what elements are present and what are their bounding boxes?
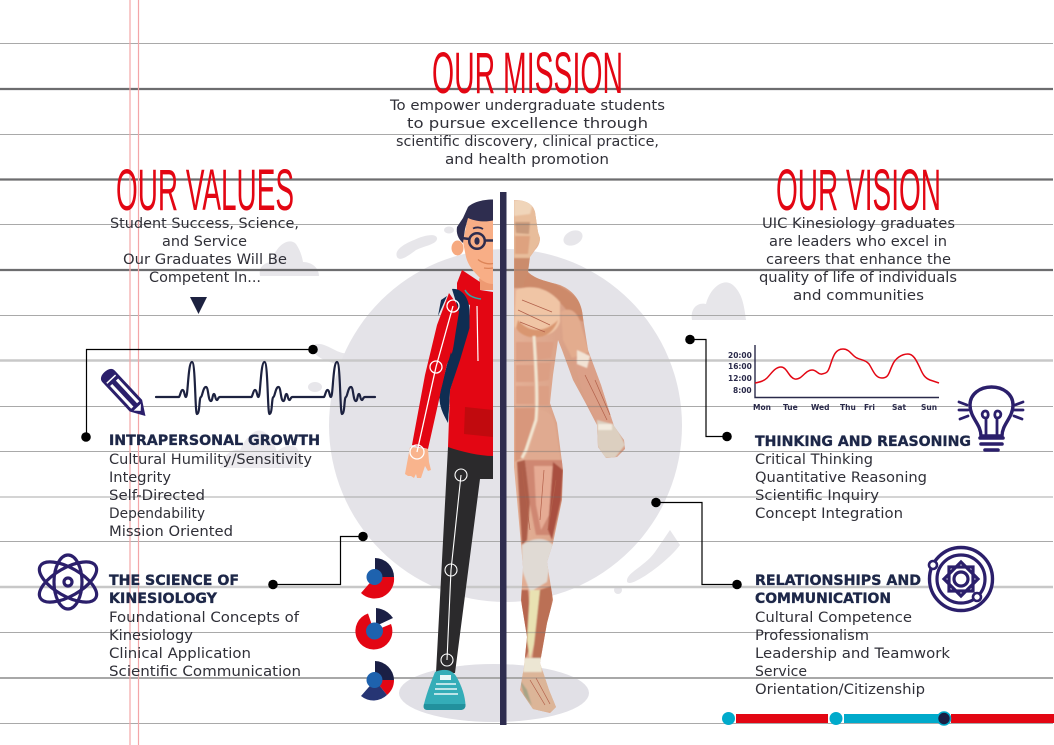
chart: weekly line chart: [728, 345, 939, 412]
text block: relationships and communication: [755, 573, 951, 698]
icon: pencil: [98, 366, 152, 422]
text block: intrapersonal growth: Cultural Humility/Sensitivity: [109, 452, 312, 468]
text block: relationships and communication: COMMUNICATION: [755, 591, 891, 607]
collar trim: [465, 290, 481, 299]
neck and face: [463, 216, 493, 290]
text block: intrapersonal growth: INTRAPERSONAL GROWTH: [109, 433, 320, 449]
text block: the science of kinesiology: Scientific Communication: [109, 664, 301, 680]
smile: [478, 260, 493, 268]
timeline node three: [938, 712, 950, 725]
text block: vision statement: [759, 216, 957, 304]
neck shadow: [479, 278, 493, 290]
text block: vision statement: are leaders who excel in: [769, 234, 947, 250]
text block: mission statement: and health promotion: [445, 152, 609, 168]
progress timeline: [722, 712, 1054, 725]
backpack lower lobe: [438, 296, 462, 423]
y axis labels: 8:00: [733, 386, 752, 395]
leg joint markers: [441, 469, 467, 666]
timeline node two: [830, 712, 842, 725]
connector: intrapersonal growth: [81, 345, 318, 442]
chart: donut one: [361, 558, 394, 599]
text block: values statement: [110, 216, 299, 286]
text block: relationships and communication: Orientation/Citizenship: [755, 682, 925, 698]
text block: the science of kinesiology: THE SCIENCE OF: [109, 573, 239, 589]
hoodie body: [448, 270, 493, 456]
text block: intrapersonal growth: Integrity: [109, 470, 171, 486]
eyebrow: [473, 227, 483, 229]
connector: relationships and communication: [651, 498, 742, 589]
arm joint markers: [410, 300, 459, 459]
text block: thinking and reasoning: Critical Thinking: [755, 452, 873, 468]
x axis labels: [753, 403, 937, 412]
connector: thinking and reasoning: [685, 335, 732, 441]
red data line: [755, 349, 939, 383]
text block: mission statement: scientific discovery, clinical practice,: [396, 134, 659, 150]
figure: anatomical muscle half: [514, 200, 625, 713]
hand: [405, 447, 431, 478]
y axis labels: [728, 351, 752, 395]
text block: values statement: Student Success, Science,: [110, 216, 299, 232]
hair: [457, 200, 493, 243]
background grey blobs: [220, 226, 746, 594]
glasses: [462, 233, 493, 249]
notebook margin lines: [130, 0, 138, 745]
backpack strap: [440, 289, 470, 422]
text block: vision statement: and communities: [793, 288, 924, 304]
shoe sole and laces: [424, 675, 466, 710]
text block: intrapersonal growth: Self-Directed: [109, 488, 205, 504]
figure: student cartoon half: [405, 200, 493, 710]
text block: thinking and reasoning: Quantitative Reasoning: [755, 470, 927, 486]
text block: thinking and reasoning: THINKING AND REASONING: [755, 434, 971, 450]
y axis labels: 16:00: [728, 362, 752, 371]
text: OUR MISSION: [432, 41, 623, 106]
central divider bar: [500, 192, 506, 725]
x axis labels: Fri: [864, 403, 875, 412]
text block: mission statement: to pursue excellence through: [407, 116, 648, 132]
chart: heartbeat line: [156, 362, 375, 414]
text block: thinking and reasoning: [755, 434, 971, 522]
ear: [452, 240, 464, 256]
text block: intrapersonal growth: Mission Oriented: [109, 524, 233, 540]
text block: the science of kinesiology: Clinical Application: [109, 646, 251, 662]
text block: vision statement: quality of life of individuals: [759, 270, 957, 286]
icon: down triangle: [190, 297, 207, 314]
chart: donut two: [355, 608, 393, 650]
text block: vision statement: UIC Kinesiology graduates: [762, 216, 955, 232]
x axis labels: Sun: [921, 403, 937, 412]
muscle detail: [514, 200, 624, 712]
hoodie pocket: [464, 407, 493, 437]
icon: atom: [33, 554, 103, 610]
text block: thinking and reasoning: Concept Integration: [755, 506, 903, 522]
y axis labels: 12:00: [728, 374, 752, 383]
text block: the science of kinesiology: KINESIOLOGY: [109, 591, 217, 607]
text block: intrapersonal growth: [109, 433, 320, 540]
text block: values statement: Competent In...: [149, 270, 261, 286]
text block: the science of kinesiology: [109, 573, 301, 680]
text block: intrapersonal growth: Dependability: [109, 506, 205, 522]
x axis labels: Tue: [783, 403, 798, 412]
text block: relationships and communication: Service: [755, 664, 807, 680]
ground shadow ellipse: [399, 664, 589, 722]
central grey circle: [329, 249, 682, 602]
text block: mission statement: [389, 98, 665, 168]
icon: orbit and star: [929, 548, 992, 610]
text block: relationships and communication: Leadership and Teamwork: [755, 646, 951, 662]
timeline node one: [722, 712, 735, 725]
pants: [436, 447, 493, 673]
x axis labels: Mon: [753, 403, 771, 412]
text block: the science of kinesiology: Kinesiology: [109, 628, 193, 644]
icon: light bulb: [959, 387, 1023, 450]
text block: relationships and communication: Cultural Competence: [755, 610, 912, 626]
chart: donut three: [361, 661, 394, 700]
axes: [755, 345, 939, 398]
timeline segments: [736, 714, 1054, 723]
text block: the science of kinesiology: Foundational Concepts of: [109, 610, 300, 626]
text block: values statement: and Service: [162, 234, 247, 250]
y axis labels: 20:00: [728, 351, 752, 360]
x axis labels: Wed: [811, 403, 829, 412]
hoodie arm: [412, 293, 461, 449]
x axis labels: Thu: [840, 403, 856, 412]
text block: values statement: Our Graduates Will Be: [123, 252, 287, 268]
drawstring: [477, 306, 478, 361]
text: OUR VALUES: [116, 158, 294, 223]
text block: vision statement: careers that enhance the: [766, 252, 951, 268]
text block: relationships and communication: Professionalism: [755, 628, 869, 644]
text block: thinking and reasoning: Scientific Inquiry: [755, 488, 879, 504]
x axis labels: Sat: [892, 403, 906, 412]
text block: relationships and communication: RELATIONSHIPS AND: [755, 573, 921, 589]
text block: mission statement: To empower undergraduate students: [389, 98, 665, 114]
shoe: [424, 670, 466, 710]
connector: science of kinesiology: [268, 532, 368, 589]
